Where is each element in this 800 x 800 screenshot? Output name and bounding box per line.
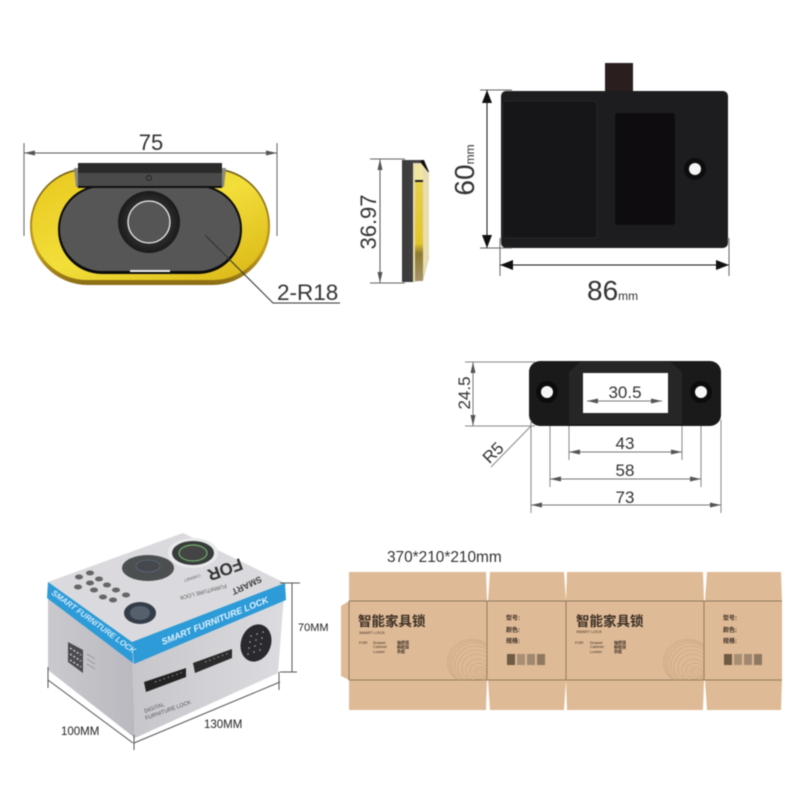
strike plate body [529,361,721,426]
dimension 73: 73 [616,488,634,507]
radius callout 2-R18 [205,235,340,305]
second print panel: FOR [575,640,584,645]
second print panel: SMART LOCK [576,629,602,634]
fingerprint sensor [118,191,180,253]
second print panel: Locker [590,649,603,654]
front face artwork: FURNITURE LOCK [145,700,192,722]
first side panel labels: 规格: [506,637,520,645]
radius callout 2-R18: 2-R18 [277,280,338,305]
dimension 58 [550,426,701,487]
dimension 130MM [134,672,280,750]
blue bands with product name [47,582,286,664]
side view of lock with dimension [356,159,429,283]
dimension 58: 58 [616,461,634,480]
back view of lock with dimensions [449,63,729,306]
first print panel: 橱柜锁 [397,644,409,650]
second print panel [575,613,644,654]
retail box with dimensions [47,533,329,750]
dimension 24.5 [455,362,535,426]
first print panel [358,613,426,654]
dimension 100MM: 100MM [61,726,99,738]
first print panel: SMART LOCK [359,630,385,635]
second print panel: 橱柜锁 [614,644,626,650]
height dimension 36.97: 36.97 [356,194,381,250]
first print panel: FOR [359,640,368,645]
dimension 70MM [280,583,329,672]
lid artwork: SMART [230,574,263,597]
dimension 100MM [48,667,133,743]
width dimension 75 [24,130,277,236]
second print panel: Drawer [590,640,604,645]
box faces [48,533,285,738]
strike plate with dimensions [455,361,721,513]
radius callout R5: R5 [479,439,508,467]
front face artwork: DIGITAL [144,702,165,715]
flat carton dieline [341,572,782,710]
dimension 30.5 [587,383,662,402]
lid artwork: FURNITURE LOCK [179,582,227,600]
first side panel labels [506,614,545,665]
gold oval faceplate [30,168,270,285]
first print panel: 智能家具锁 [358,613,426,629]
radius callout R5 [479,426,531,467]
width dimension 75: 75 [139,130,163,155]
second side panel labels: 规格: [723,637,737,645]
first print panel: Locker [373,649,386,654]
second side panel labels: 型号: [723,614,737,622]
height dimension 60mm: 60mm [449,144,480,196]
lock side profile [402,160,429,282]
dimension 43 [569,426,682,460]
dimension 24.5: 24.5 [455,376,474,410]
second print panel: 衣柜 [614,648,622,654]
top latch bar [78,163,222,188]
width dimension 86mm: 86mm [587,275,638,306]
dimension 130MM: 130MM [204,719,242,731]
lid artwork [74,538,263,624]
width dimension 86mm [500,238,729,306]
first print panel: 衣柜 [397,648,405,654]
dimension 70MM: 70MM [298,622,329,634]
front face artwork [68,620,277,722]
second print panel: Cabinet [590,644,605,649]
lid artwork: CABINET [183,573,201,583]
second print panel: 抽屉锁 [614,639,626,645]
fold lines [349,601,782,680]
carton size label: 370*210*210mm [387,549,502,566]
first fingerprint graphic [447,640,486,680]
first print panel: 抽屉锁 [397,639,409,645]
carton panels [341,572,782,710]
first side panel labels: 型号: [506,614,520,622]
second side panel labels: 颜色: [723,626,737,634]
second side panel labels [723,614,762,665]
blue bands with product name: SMART FURNITURE LOCK [50,588,138,656]
dimension 30.5: 30.5 [608,383,642,402]
dimension 73 [531,420,721,513]
lid artwork: FOR [205,554,245,584]
first print panel: Cabinet [373,644,388,649]
second fingerprint graphic [663,640,703,680]
first print panel: Drawer [373,640,387,645]
first side panel labels: 颜色: [506,626,520,634]
front view of lock with dimensions [24,130,340,305]
height dimension 60mm [449,90,512,248]
dimension 43: 43 [616,434,634,453]
lock body [501,63,728,248]
blue bands with product name: SMART FURNITURE LOCK [160,594,271,647]
second print panel: 智能家具锁 [576,613,644,629]
